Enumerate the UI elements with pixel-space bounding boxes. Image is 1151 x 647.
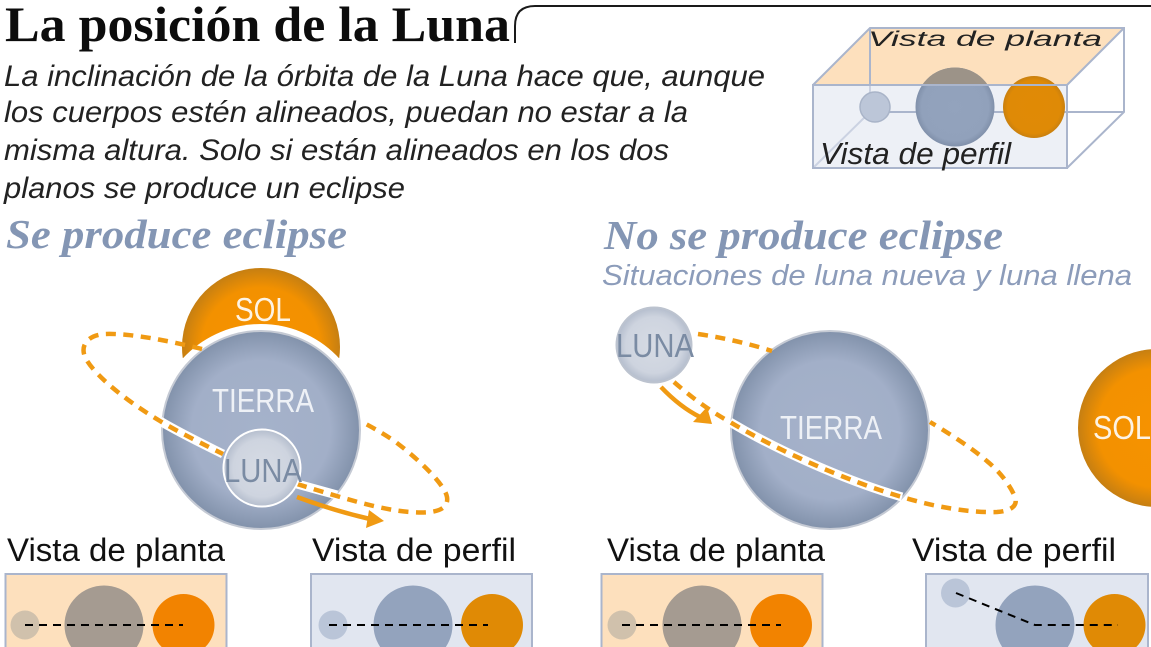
- intro text: planos se produce un eclipse: [3, 172, 405, 205]
- label: profile view 2: Vista de perfil: [912, 532, 1116, 568]
- intro text: misma altura. Solo si están alineados en los dos: [4, 134, 669, 167]
- label: plan view 1: Vista de planta: [7, 532, 225, 568]
- sun: [182, 268, 340, 358]
- scene: no eclipse: [616, 308, 1151, 529]
- diagram: plan and profile views box: Vista de planta: [868, 28, 1102, 51]
- panel: profile view eclipse: [311, 574, 532, 647]
- label moon: LUNA: [224, 452, 302, 489]
- arrow: [661, 387, 712, 424]
- intro text: La inclinación de la órbita de la Luna hace que, aunque: [4, 60, 765, 93]
- panel: profile view no eclipse: [926, 574, 1148, 647]
- top rule: [515, 6, 1151, 43]
- earth: [155, 324, 367, 536]
- label earth: TIERRA: [212, 382, 314, 419]
- intro text: [3, 60, 765, 205]
- label moon: LUNA: [616, 327, 694, 364]
- diagram: plan and profile views box: [813, 28, 1124, 171]
- heading: eclipse: Se produce eclipse: [6, 211, 347, 257]
- heading: no eclipse: No se produce eclipse: [603, 212, 1003, 258]
- orbit: [84, 334, 447, 512]
- intro text: los cuerpos estén alineados, puedan no estar a la: [4, 96, 688, 129]
- sun: [1078, 349, 1151, 507]
- scene: eclipse occurs: [84, 268, 447, 536]
- label: profile view 1: Vista de perfil: [312, 532, 516, 568]
- moon: [616, 308, 692, 382]
- panel: plan view eclipse: [6, 574, 226, 647]
- label: plan view 2: Vista de planta: [607, 532, 825, 568]
- label sun: SOL: [235, 291, 291, 328]
- earth: [731, 331, 929, 529]
- arrow: [297, 497, 384, 528]
- moon: [224, 430, 300, 506]
- orbit: [674, 334, 1016, 512]
- subheading: Situaciones de luna nueva y luna llena: [602, 260, 1132, 292]
- panel: plan view no eclipse: [602, 574, 822, 647]
- diagram: plan and profile views box: Vista de perfil: [820, 136, 1012, 171]
- label earth: TIERRA: [780, 409, 882, 446]
